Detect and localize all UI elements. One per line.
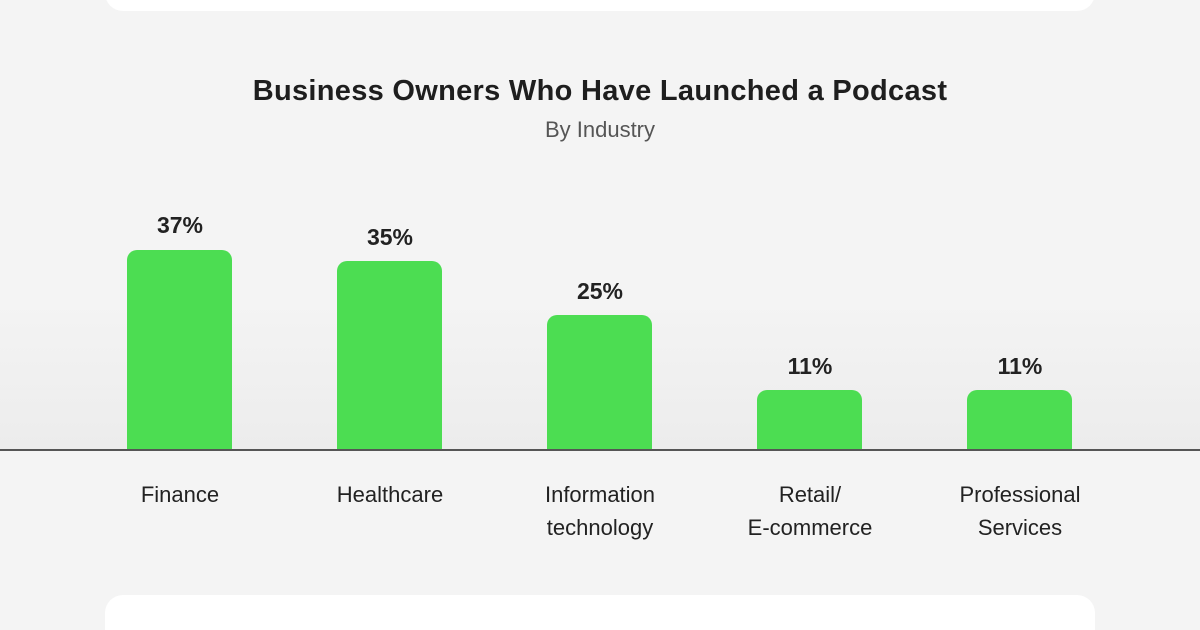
title: Business Owners Who Have Launched a Podcast xyxy=(253,75,947,107)
bar: Professional xyxy=(967,390,1072,450)
subtitle: By Industry xyxy=(545,117,655,142)
baseline xyxy=(0,449,1200,451)
bar: Retail xyxy=(757,390,862,450)
bar chart xyxy=(0,212,1200,540)
label: Professional xyxy=(959,482,1081,540)
label: IT xyxy=(545,482,655,540)
label: Professional: Professional xyxy=(959,482,1081,507)
label: Healthcare: Healthcare xyxy=(337,482,443,507)
value: 11% professional: 11% xyxy=(998,353,1042,379)
label: IT: Information xyxy=(545,482,655,507)
label: Professional: Services xyxy=(978,515,1062,540)
value: 37%: 37% xyxy=(157,212,203,238)
value: 11% retail: 11% xyxy=(788,353,832,379)
noise band xyxy=(0,300,1200,450)
value: 25%: 25% xyxy=(577,278,623,304)
label: Retail: Retail/ xyxy=(779,482,841,507)
bar: IT xyxy=(547,315,652,450)
value: 35%: 35% xyxy=(367,224,413,250)
bar: Finance xyxy=(127,250,232,450)
label: Retail xyxy=(748,482,872,540)
bottom card xyxy=(105,595,1095,630)
top card xyxy=(105,0,1095,11)
label: Retail: E-commerce xyxy=(748,515,872,540)
label: Finance: Finance xyxy=(141,482,219,507)
label: IT: technology xyxy=(547,515,653,540)
bar: Healthcare xyxy=(337,261,442,450)
